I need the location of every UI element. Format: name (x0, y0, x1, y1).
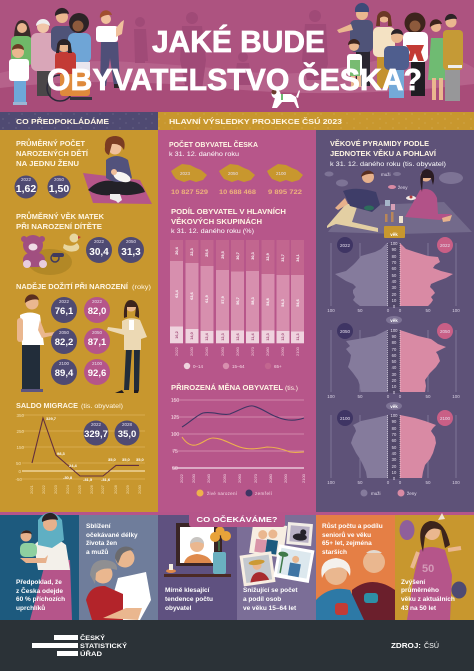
pyramid 2022: 50 (425, 308, 431, 313)
pyramid 2050: 50 (392, 359, 397, 364)
tab: what we expect: CO OČEKÁVÁME? (196, 515, 278, 524)
pyramid 2100: 90 (392, 419, 397, 424)
map year labels: 2023 (180, 171, 191, 176)
line chart: net migration: 2025 (77, 484, 82, 494)
pyramid 2050: 50 (425, 394, 431, 399)
label: věk on basket: věk (390, 232, 398, 237)
pyramid 2022: 60 (392, 266, 397, 271)
pyramid 2022: 2022 (340, 243, 351, 248)
line chart: net migration: 150 (16, 445, 24, 450)
migration values (84, 420, 140, 446)
stacked bar chart: age groups: 2022 (174, 346, 179, 356)
line chart: net migration: 2030 (137, 484, 142, 494)
line chart: net migration: -50 (15, 477, 22, 482)
stacked bar chart: age groups: 11,4 (251, 333, 255, 341)
age label: věk (390, 318, 398, 323)
pyramid 2022: 0 (393, 304, 396, 309)
stacked bar chart: age groups: 2080 (265, 346, 270, 356)
heading: population (169, 140, 259, 158)
card: average age (395, 513, 474, 620)
caption: 43 na 50 let (401, 605, 437, 612)
pyramid 2050: 30 (392, 372, 397, 377)
stacked bar chart: age groups: 54,3 (281, 299, 285, 307)
caption: Zvýšení (401, 579, 425, 586)
line chart: net migration: 2028 (113, 484, 118, 494)
line chart: natural change: 2100 (301, 473, 306, 483)
line chart: natural change: 50 (172, 466, 178, 472)
line chart: net migration: 50 (16, 461, 21, 466)
stacked bar chart: age groups: 32,9 (266, 253, 270, 261)
line chart: net migration: 2023 (53, 484, 58, 494)
line chart: net migration: 2026 (89, 484, 94, 494)
line chart: natural change: 75 (172, 449, 178, 455)
fertility values: 2050 (54, 177, 65, 182)
stacked bar chart: age groups: 30,7 (236, 252, 240, 260)
legend: age groups: 65+ (274, 364, 282, 369)
heading: age groups (171, 207, 286, 235)
maternal age values: 30,4 (89, 247, 109, 258)
stacked bar chart: age groups: 2070 (250, 346, 255, 356)
line chart: net migration: 0 (18, 469, 21, 474)
fertility values: 1,50 (49, 183, 69, 195)
pyramid 2050: 100 (390, 328, 398, 333)
line chart: natural change: 2022 (179, 473, 184, 483)
heading: population: POČET OBYVATEL ČESKA (169, 140, 259, 149)
source: ČSÚ (424, 641, 439, 650)
pyramid 2050 (327, 323, 460, 399)
logo: STATISTICKÝ (80, 641, 128, 650)
stacked bar chart: age groups: 63,4 (175, 289, 179, 298)
legend: sexes: muži (371, 491, 381, 496)
line chart: net migration: 2027 (100, 484, 105, 494)
life expectancy values: 82,0 (88, 306, 106, 317)
legend: age groups (184, 363, 282, 369)
pyramid 2022: 30 (392, 285, 397, 290)
pyramid 2100: 70 (392, 432, 397, 437)
maternal age values: 31,3 (121, 247, 141, 258)
heading: fertility: NAROZENÝCH DĚTÍ (16, 149, 89, 158)
card: refugees (0, 512, 79, 620)
icon: woman (107, 300, 147, 393)
stacked bar chart: age groups: 33,7 (281, 254, 285, 262)
caption (322, 522, 383, 556)
stacked bar chart: age groups: 63,6 (190, 292, 194, 300)
stacked bar chart: age groups: 12,3 (266, 333, 270, 341)
line chart: natural change: 150 (171, 398, 179, 404)
stacked bar chart: age groups: 2090 (280, 346, 285, 356)
pyramid 2100: 80 (392, 426, 397, 431)
tab: what we expect (189, 512, 285, 527)
line chart: net migration: 350 (16, 413, 24, 418)
pyramid 2050: 90 (392, 334, 397, 339)
stacked bar chart: age groups: 12,0 (281, 333, 285, 341)
line chart: natural change: 2040 (206, 473, 211, 483)
heading: fertility (16, 138, 89, 168)
icon: picnic couple (324, 169, 472, 238)
pyramid 2050: 20 (392, 378, 397, 383)
line chart: net migration: 35,0 (122, 457, 131, 462)
caption: Mírně klesající (165, 587, 210, 594)
line chart: natural change: 2060 (237, 473, 242, 483)
life expectancy values: 82,2 (55, 337, 73, 348)
legend: sexes (360, 490, 417, 496)
stacked bar chart: age groups: 2030 (189, 346, 194, 356)
pyramid 2100: 100 (390, 413, 398, 418)
line chart: net migration: -31,5 (83, 477, 93, 482)
caption (16, 579, 65, 612)
pyramid 2022: 10 (392, 298, 397, 303)
heading: pyramids: JEDNOTEK VĚKU A POHLAVÍ (330, 149, 437, 158)
caption: průměrného (401, 586, 439, 594)
caption: Sblížení (86, 523, 111, 530)
pyramid 2100: 0 (387, 480, 390, 485)
people group right (337, 3, 463, 101)
heading: population: k 31. 12. daného roku (169, 151, 239, 158)
pyramid 2022: 40 (392, 279, 397, 284)
migration values: 2028 (122, 422, 133, 427)
stacked bar chart: age groups: 12,3 (221, 333, 225, 341)
pyramid 2022: 0 (387, 308, 390, 313)
pyramid 2022: 80 (392, 254, 397, 259)
life expectancy values: 92,6 (88, 368, 106, 379)
pyramid 2100: 10 (392, 470, 397, 475)
caption: uprchlíků (16, 604, 45, 612)
line chart: net migration: 2024 (65, 484, 70, 494)
heading: maternal age (16, 211, 105, 231)
heading: pyramids (330, 139, 446, 168)
caption: tendence počtu (165, 596, 213, 603)
pyramid 2100: 40 (392, 451, 397, 456)
pyramid 2100 (327, 410, 460, 485)
pyramid 2022: 50 (357, 308, 363, 313)
legend: age groups: 0–14 (193, 364, 204, 369)
line chart: net migration: 329,7 (46, 416, 57, 421)
stacked bar chart: age groups: 58,3 (251, 297, 255, 305)
stacked bar chart: age groups: 2100 (295, 346, 300, 356)
card: life expectancy convergence (79, 515, 158, 620)
heading: migration: (tis. obyvatel) (81, 404, 123, 410)
pyramid 2100: 0 (399, 480, 402, 485)
pyramid 2100: 50 (357, 480, 363, 485)
migration values: 2022 (91, 422, 102, 427)
pyramid 2100: 100 (327, 480, 335, 485)
stacked bar chart: age groups: 54,6 (296, 299, 300, 307)
caption: obyvatel (165, 605, 192, 612)
card: working age decline (237, 515, 316, 620)
heading: natural change: PŘIROZENÁ MĚNA OBYVATEL (171, 383, 283, 392)
left section header strip: CO PŘEDPOKLÁDÁME (16, 117, 109, 126)
heading: maternal age: PŘI NAROZENÍ DÍTĚTE (16, 222, 102, 231)
caption: 65+ let, zejména (322, 540, 372, 547)
heading: maternal age: PRŮMĚRNÝ VĚK MATEK (16, 211, 105, 221)
pyramid 2100: 2100 (340, 416, 351, 421)
header panel (0, 0, 474, 112)
life expectancy values: 2100 (92, 361, 103, 366)
pyramid 2050: 80 (392, 340, 397, 345)
stacked bar chart: age groups: 34,1 (296, 254, 300, 262)
caption (165, 587, 213, 612)
caption: života žen (86, 540, 117, 547)
line chart: natural change: 2090 (283, 473, 288, 483)
stacked bar chart: age groups: 2050 (220, 346, 225, 356)
icon: toys (21, 234, 81, 275)
stacked bar chart: age groups: 12,6 (236, 333, 240, 341)
panel: main results (158, 130, 316, 512)
heading: pyramids: VĚKOVÉ PYRAMIDY PODLE (330, 139, 429, 148)
maps of Czechia (171, 164, 303, 182)
pyramid 2022: 0 (399, 308, 402, 313)
stacked bar chart: age groups (170, 240, 304, 356)
pyramid 2022: 70 (392, 260, 397, 265)
caption (86, 523, 138, 556)
card: population decline (158, 515, 237, 620)
line chart: net migration: -31,6 (101, 477, 111, 482)
card: seniors (316, 515, 395, 620)
fertility values: 2022 (21, 177, 32, 182)
caption: seniorů ve věku (322, 531, 371, 539)
line chart: natural change: 2080 (268, 473, 273, 483)
pyramid 2050: 0 (387, 394, 390, 399)
logo (32, 633, 128, 658)
line chart: natural change: 2050 (222, 473, 227, 483)
life expectancy values: 87,1 (88, 337, 107, 348)
label: muži: muži (381, 172, 391, 177)
pyramid 2100: 50 (425, 480, 431, 485)
line chart: net migration: 250 (16, 429, 24, 434)
icon: man (17, 294, 55, 392)
stacked bar chart: age groups: 11,3 (296, 333, 300, 341)
caption: Růst počtu a podílu (322, 522, 383, 530)
title: JAKÉ BUDE (152, 24, 325, 59)
heading: natural change: (tis.) (285, 385, 298, 392)
age label (386, 402, 402, 410)
caption: očekávané délky (86, 532, 138, 539)
caption: ve věku 15–64 let (243, 605, 297, 612)
pyramid 2050: 10 (392, 384, 397, 389)
pyramid 2022: 90 (392, 247, 397, 252)
label: ženy (388, 185, 408, 190)
title (47, 24, 422, 97)
heading: fertility: PRŮMĚRNÝ POČET (16, 138, 85, 148)
pyramid 2022: 100 (452, 308, 460, 313)
pyramid 2100: 60 (392, 438, 397, 443)
heading: age groups: k 31. 12. daného roku (%) (171, 228, 254, 235)
line chart: natural change: 125 (171, 415, 179, 421)
pyramid 2050: 0 (393, 390, 396, 395)
panel: population pyramids (316, 130, 474, 512)
life expectancy values (51, 297, 110, 385)
line chart: net migration: 2021 (29, 484, 34, 494)
pyramid 2050: 70 (392, 347, 397, 352)
caption: 60 % příchozích (16, 596, 65, 603)
pyramid 2100: 20 (392, 464, 397, 469)
line chart: natural change: 2030 (191, 473, 196, 483)
stacked bar chart: age groups: 2040 (204, 346, 209, 356)
legend: natural change: zemřelí (255, 491, 273, 496)
life expectancy values: 89,4 (55, 368, 74, 379)
line chart: net migration: 98,3 (57, 451, 66, 456)
age label: věk (390, 404, 398, 409)
pyramid 2022: 100 (390, 241, 398, 246)
life expectancy values: 2050 (59, 330, 70, 335)
legend: natural change: živé narození (207, 491, 238, 496)
stacked bar chart: age groups: 2060 (235, 346, 240, 356)
population values: 9 895 722 (268, 189, 302, 196)
legend: natural change (196, 490, 273, 496)
population values (171, 189, 302, 196)
stacked bar chart: age groups: 16,2 (175, 331, 179, 339)
map year labels: 2100 (276, 171, 287, 176)
logo: ÚŘAD (80, 649, 102, 658)
pyramid 2050: 40 (392, 365, 397, 370)
caption: a mužů (86, 548, 108, 556)
pyramid 2100: 50 (392, 445, 397, 450)
pyramid 2050: 2050 (440, 329, 451, 334)
line chart: net migration: 24,4 (69, 463, 78, 468)
logo: ČESKÝ (80, 633, 106, 642)
caption: z Česka odejde (16, 586, 63, 595)
pyramid 2100: 100 (452, 480, 460, 485)
line chart: net migration (15, 413, 145, 494)
pyramid 2050: 100 (327, 394, 335, 399)
right section header strip: HLAVNÍ VÝSLEDKY PROJEKCE ČSÚ 2023 (169, 117, 342, 126)
panel: assumptions (0, 130, 158, 512)
pyramid 2050: 0 (399, 394, 402, 399)
stacked bar chart: age groups: 25,6 (205, 249, 209, 257)
pyramid 2022 (327, 237, 460, 313)
population values: 10 688 468 (219, 189, 256, 196)
fertility values: 1,62 (16, 183, 36, 195)
pyramid 2022: 50 (392, 273, 397, 278)
stacked bar chart: age groups: 22,3 (190, 248, 194, 256)
card: average age: 50 (422, 563, 434, 575)
icon: dog (272, 90, 300, 108)
stacked bar chart: age groups: 12,4 (205, 332, 209, 341)
pyramid 2022: 20 (392, 292, 397, 297)
caption: Předpoklad, že (16, 579, 62, 586)
caption: Snižující se počet (243, 587, 298, 594)
stacked bar chart: age groups: 57,9 (221, 296, 225, 304)
maternal age values: 2050 (126, 239, 137, 244)
line chart: net migration: 2022 (41, 484, 46, 494)
fertility values (14, 176, 70, 198)
age label (386, 316, 402, 324)
life expectancy values: 2022 (59, 299, 70, 304)
caption: věku z aktuálních (401, 596, 455, 603)
title: OBYVATELSTVO ČESKA? (47, 61, 422, 97)
population values: 10 827 529 (171, 189, 208, 196)
migration values: 35,0 (118, 429, 136, 440)
heading: life expectancy: NADĚJE DOŽITÍ PŘI NAROZENÍ (16, 282, 129, 291)
heading: life expectancy: (roky) (132, 284, 151, 291)
pyramid 2050: 2050 (340, 329, 351, 334)
line chart: net migration: 35,0 (136, 457, 145, 462)
life expectancy values: 2100 (59, 361, 70, 366)
line chart: net migration: -30,8 (63, 475, 73, 480)
pyramid 2050: 60 (392, 353, 397, 358)
caption (401, 579, 455, 612)
pyramid 2100: 30 (392, 457, 397, 462)
map year labels (180, 171, 287, 176)
label: ženy: ženy (398, 185, 408, 190)
line chart: natural change: 2070 (253, 473, 258, 483)
background silhouettes (134, 10, 328, 90)
legend: sexes: ženy (407, 491, 417, 496)
heading: age groups: PODÍL OBYVATEL V HLAVNÍCH (171, 207, 286, 216)
pyramid 2022: 100 (327, 308, 335, 313)
stacked bar chart: age groups: 61,9 (205, 295, 209, 303)
map year labels: 2050 (228, 171, 239, 176)
migration values: 329,7 (84, 429, 108, 440)
pyramid 2100: 2100 (440, 416, 451, 421)
maternal age values (86, 237, 144, 263)
line chart: net migration: 2029 (125, 484, 130, 494)
pyramid 2050: 100 (452, 394, 460, 399)
heading: migration (16, 401, 123, 410)
stacked bar chart: age groups: 20,4 (175, 246, 179, 255)
source: ZDROJ: (391, 641, 421, 650)
pyramid 2050: 50 (357, 394, 363, 399)
people group left (9, 8, 124, 105)
pyramid 2022: 2022 (440, 243, 451, 248)
legend: age groups: 15–64 (232, 364, 245, 369)
heading: pyramids: k 31. 12. daného roku (tis. obyvatel) (330, 161, 446, 168)
heading: age groups: VĚKOVÝCH SKUPINÁCH (171, 217, 262, 226)
life expectancy values: 76,1 (55, 306, 74, 317)
caption: a podíl osob (243, 596, 281, 603)
source (391, 641, 439, 650)
pyramid 2100: 0 (393, 476, 396, 481)
footer (0, 620, 474, 671)
life expectancy values: 2022 (92, 299, 103, 304)
maternal age values: 2022 (94, 239, 105, 244)
stacked bar chart: age groups: 14,0 (190, 332, 194, 340)
line chart: natural change (171, 398, 306, 483)
left section header strip (0, 112, 158, 130)
life expectancy values: 2050 (92, 330, 103, 335)
right section header strip (158, 112, 474, 130)
panel: what we expect (0, 512, 474, 620)
stacked bar chart: age groups: 30,3 (251, 252, 255, 260)
heading: fertility: NA JEDNU ŽENU (16, 159, 79, 168)
stacked bar chart: age groups: 29,5 (221, 251, 225, 259)
icon: breastfeeding mother (83, 136, 152, 204)
stacked bar chart: age groups: 54,8 (266, 298, 270, 306)
caption (243, 587, 298, 612)
line chart: natural change: 100 (171, 432, 179, 438)
line chart: net migration: 35,0 (108, 457, 117, 462)
caption: starších (322, 549, 347, 556)
heading: migration: SALDO MIGRACE (16, 401, 78, 410)
stacked bar chart: age groups: 56,7 (236, 297, 240, 305)
